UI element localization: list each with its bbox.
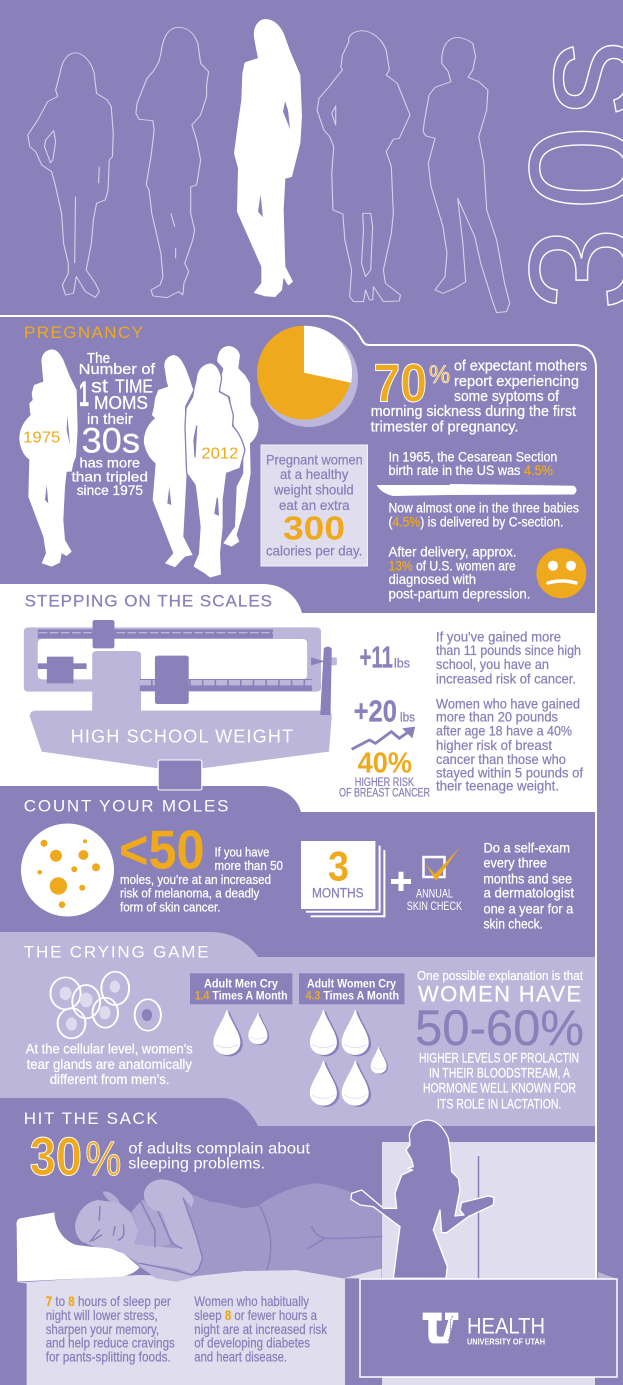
text: self exam advice: months and see — [484, 870, 572, 886]
text: first time moms — [72, 350, 156, 498]
text: prolactin explanation: HORMONE WELL KNOWN FOR — [423, 1081, 576, 1096]
heading: count your moles: COUNT YOUR MOLES — [24, 797, 228, 816]
stat: 30 percent: of adults complain about — [128, 1140, 311, 1157]
stat: plus 20 lbs: lbs — [400, 710, 415, 725]
logo box: University of Utah Health: HEALTH — [467, 1313, 545, 1338]
lower arm piece — [138, 1263, 195, 1282]
text: sleep advice left: sharpen your memory, — [46, 1321, 159, 1337]
icon: calendar pages, 3 months — [301, 841, 385, 917]
text: post-partum depression: After delivery, approx. — [388, 545, 516, 560]
icon: calendar pages, 3 months: 3 — [328, 843, 349, 890]
text: sleep advice right: of developing diabetes — [194, 1335, 310, 1351]
text: sleep advice right: night are at increased risk — [194, 1321, 328, 1337]
outline woman 4 — [317, 31, 410, 302]
stat: 70 percent morning sickness: 70 — [374, 354, 427, 414]
stat: 70 percent morning sickness: morning sickness during the first — [371, 404, 576, 420]
text: self exam advice: Do a self-exam — [484, 840, 570, 856]
heading: stepping on the scales: STEPPING ON THE SCALES — [25, 592, 272, 611]
callout: 300 calories: at a healthy — [280, 466, 348, 482]
stat: fewer than 50 moles: moles, you're at an increased — [120, 872, 271, 887]
icon: U logo — [423, 1313, 458, 1343]
icon: calendar pages, 3 months: MONTHS — [312, 885, 364, 900]
text: weight gain facts: than 11 pounds since high — [436, 642, 581, 658]
panel: adult women cry — [299, 973, 404, 1004]
text: cellular level — [26, 1040, 193, 1087]
panel: adult men cry — [190, 973, 292, 1004]
panel: adult men cry: Adult Men Cry — [204, 976, 278, 990]
text: cellular level: different from men's. — [50, 1071, 170, 1087]
logo box: University of Utah Health — [360, 1279, 617, 1377]
text: weight gain facts: their teenage weight. — [436, 778, 559, 794]
icon: tear drops for men — [213, 1009, 269, 1056]
stat: 30 percent: sleeping problems. — [128, 1155, 265, 1172]
callout: 300 calories: 300 — [283, 509, 345, 546]
text: prolactin explanation: IN THEIR BLOODSTREAM, A — [429, 1065, 570, 1080]
callout: 300 calories: eat an extra — [279, 497, 350, 513]
outline woman 1 — [28, 53, 113, 297]
text: first time moms: The — [87, 350, 110, 367]
text: cesarean stat — [388, 450, 579, 530]
bed and text panel — [17, 1268, 382, 1385]
panel: adult men cry: 1.4 Times A Month — [195, 988, 288, 1002]
stat: fewer than 50 moles: If you have — [214, 845, 269, 860]
stat: fewer than 50 moles: more than 50 — [214, 858, 283, 873]
text: first time moms: than tripled — [72, 469, 148, 485]
stat: plus 11 lbs: +11 — [360, 639, 393, 674]
stat: 30 percent: 30 — [30, 1127, 82, 1187]
stat: 40 percent higher risk: OF BREAST CANCER — [339, 786, 430, 800]
outline woman 5 — [423, 37, 510, 313]
text: post-partum depression — [388, 545, 530, 601]
text: weight gain facts: increased risk of cancer. — [436, 670, 576, 686]
panel: crying game background — [0, 932, 595, 1126]
silhouette: back woman left — [144, 355, 193, 567]
label: high school weight: HIGH SCHOOL WEIGHT — [71, 726, 293, 746]
text: weight gain facts: stayed within 5 pounds of — [436, 764, 583, 780]
stat: fewer than 50 moles: form of skin cancer. — [120, 900, 220, 915]
icon: rising arrow — [352, 727, 415, 749]
icon: balance scale — [24, 620, 337, 790]
stat: fewer than 50 moles: <50 — [119, 818, 205, 880]
illustration: standing woman silhouette — [351, 1120, 494, 1278]
text: weight gain facts: after age 18 have a 40% — [436, 723, 572, 739]
logo box: University of Utah Health: UNIVERSITY OF UTAH — [467, 1336, 545, 1346]
icon: scalpel — [377, 484, 576, 496]
arm — [117, 1179, 203, 1274]
body — [113, 1183, 382, 1282]
hero: outlined women silhouettes — [28, 27, 510, 313]
text: prolactin explanation: ITS ROLE IN LACTATION. — [437, 1096, 561, 1111]
text: prolactin explanation: 50-60% — [415, 1000, 584, 1056]
text: sleep advice right: and heart disease. — [194, 1349, 287, 1365]
text: self exam advice: one a year for a — [484, 900, 573, 916]
text: self exam advice — [484, 840, 574, 931]
silhouettes: pregnant women — [19, 346, 259, 578]
text: first time moms: in their — [87, 411, 133, 428]
text: first time moms: 30s — [82, 422, 140, 461]
text: cesarean stat: (4.5%) is delivered by C-section. — [388, 515, 563, 530]
icon: tear drops for women — [310, 1009, 388, 1107]
silhouette: back woman right — [217, 346, 259, 547]
illustration: sleeping woman on bed — [16, 1179, 382, 1385]
text: sleep advice left: for pants-splitting foods. — [46, 1349, 171, 1365]
corner triangle — [598, 1272, 617, 1279]
text: sleep advice left: and help reduce cravings — [46, 1335, 175, 1351]
text: weight gain facts: cancer than those who — [436, 751, 566, 767]
text: first time moms: MOMS — [94, 393, 148, 413]
stat: 30 percent — [30, 1127, 311, 1187]
stat: 40 percent higher risk: HIGHER RISK — [355, 775, 414, 789]
icon: sad face — [536, 548, 586, 598]
text: prolactin explanation: WOMEN HAVE — [418, 982, 581, 1007]
pie chart: 70 percent — [257, 326, 358, 427]
hair bun — [103, 1191, 120, 1204]
text: cesarean stat: birth rate in the US was 4.5% — [388, 463, 553, 478]
text: self exam advice: every three — [484, 854, 547, 870]
icon: annual skin check — [407, 847, 462, 913]
heading: pregnancy: PREGNANCY — [24, 323, 143, 342]
text: first time moms: 1 — [79, 375, 89, 414]
icon: tear gland cells — [50, 972, 161, 1038]
stat: plus 20 lbs: +20 — [354, 694, 397, 729]
text: sleep advice right: sleep 8 or fewer hours a — [194, 1307, 317, 1323]
stat: 70 percent morning sickness: report experiencing — [454, 374, 579, 390]
text: prolactin explanation — [415, 968, 584, 1111]
text: first time moms: since 1975 — [77, 482, 143, 498]
text: prolactin explanation: One possible explanation is that — [417, 968, 583, 983]
text: cesarean stat: In 1965, the Cesarean Section — [388, 450, 557, 465]
callout: 300 calories — [261, 445, 368, 566]
text: cellular level: At the cellular level, women's — [26, 1040, 193, 1056]
silhouette: 2012 woman — [185, 363, 245, 578]
text: cellular level: tear glands are anatomically — [27, 1056, 192, 1072]
stat: 70 percent morning sickness: trimester of pregnancy. — [371, 420, 518, 436]
text: weight gain facts: If you've gained more — [436, 629, 561, 645]
stat: 70 percent morning sickness: some syptoms of — [454, 389, 560, 405]
text: weight gain facts — [436, 629, 583, 794]
stat: 70 percent morning sickness — [371, 354, 587, 436]
callout: 300 calories: calories per day. — [266, 543, 362, 559]
stat: 40 percent higher risk — [339, 748, 430, 800]
icon: annual skin check: SKIN CHECK — [407, 899, 462, 913]
label: 1975: 1975 — [23, 430, 61, 447]
text: self exam advice: a dermatologist — [484, 885, 574, 901]
text: cesarean stat: Now almost one in the three babies — [388, 501, 579, 516]
stat: 40 percent higher risk: 40% — [358, 748, 412, 780]
text: weight gain facts: Women who have gained — [436, 695, 580, 711]
stat: 70 percent morning sickness: of expectant mothers — [454, 359, 587, 375]
text: sleep advice right — [194, 1293, 328, 1365]
text: first time moms: has more — [80, 455, 140, 471]
head — [75, 1200, 138, 1250]
text: weight gain facts: school, you have an — [436, 656, 549, 672]
heading: hit the sack: HIT THE SACK — [24, 1109, 158, 1128]
pillow — [16, 1212, 139, 1282]
panel: adult women cry: Adult Women Cry — [307, 976, 396, 990]
text: sleep advice left: night will lower stress, — [46, 1307, 158, 1323]
hero: white woman silhouette — [234, 19, 302, 297]
stat: fewer than 50 moles — [119, 818, 283, 915]
text: first time moms: Number of — [79, 361, 156, 378]
text: first time moms: TIME — [115, 377, 153, 397]
stat: 30 percent: % — [85, 1133, 121, 1186]
heading: the crying game: THE CRYING GAME — [24, 942, 209, 961]
panel: pregnancy outline — [0, 316, 596, 1279]
text: post-partum depression: post-partum depression. — [388, 586, 530, 601]
panel: bedroom background — [382, 1142, 595, 1385]
illustration: door line — [478, 1156, 480, 1279]
text: first time moms: st — [91, 377, 109, 398]
text: self exam advice: skin check. — [484, 915, 543, 931]
stat: plus 11 lbs: lbs — [394, 655, 410, 670]
text: weight gain facts: higher risk of breast — [436, 737, 552, 753]
icon: plus — [391, 872, 411, 891]
panel: adult women cry: 4.3 Times A Month — [306, 988, 399, 1002]
icon: moles circle — [21, 824, 114, 916]
text: sleep advice left — [46, 1293, 175, 1365]
icon: annual skin check: ANNUAL — [416, 886, 453, 900]
outline woman 2 — [136, 27, 209, 298]
callout: 300 calories: Pregnant women — [266, 451, 363, 467]
text: weight gain facts: more than 20 pounds — [436, 709, 558, 725]
silhouette: 1975 woman — [19, 349, 78, 567]
panel: scales background — [0, 584, 597, 812]
text: sleep advice left: 7 to 8 hours of sleep per — [46, 1293, 171, 1309]
stat: fewer than 50 moles: risk of melanoma, a deadly — [120, 886, 260, 901]
stat: 70 percent morning sickness: % — [429, 361, 450, 389]
text: post-partum depression: diagnosed with — [388, 572, 476, 587]
text: sleep advice right: Women who habitually — [194, 1293, 309, 1309]
callout: 300 calories: weight should — [273, 481, 354, 497]
label: 2012: 2012 — [201, 445, 239, 462]
chest — [132, 1200, 172, 1248]
text: post-partum depression: 13% of U.S. women are — [388, 559, 516, 574]
